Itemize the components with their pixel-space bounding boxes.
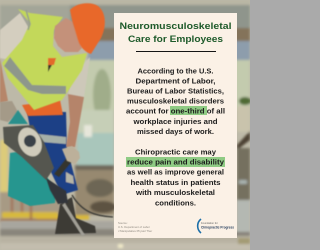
hi-vis vest [2, 9, 87, 110]
text block: statistics: musculoskeletal disorders [127, 96, 224, 106]
head and neck [54, 18, 82, 52]
text block: statistics: workplace injuries and [132, 117, 218, 126]
heading [120, 21, 232, 44]
text block: chiropractic care: with musculoskeletal [135, 188, 215, 197]
heading divider [136, 51, 216, 52]
source note: U.S. Department of Labor [118, 225, 150, 229]
logo: Foundation for Chiropractic Progress [198, 219, 235, 233]
worker legs and trousers [27, 112, 78, 195]
text block: statistics: Bureau of Labor Statistics, [127, 86, 224, 96]
text block: chiropractic care [127, 148, 225, 208]
source note: J Manipulative Physiol Ther [118, 229, 152, 233]
gloved hands [62, 146, 80, 164]
text block: chiropractic care: Chiropractic care may [135, 148, 217, 156]
highlight: reduce pain and disability [126, 157, 225, 167]
worker arm and shirt [0, 13, 90, 147]
text block: chiropractic care: health status in patients [130, 178, 220, 187]
heading: Neuromusculoskeletal [120, 21, 232, 31]
text block: statistics: According to the U.S. [138, 66, 214, 76]
pavement [0, 221, 250, 250]
highlight: one-third [170, 106, 207, 115]
text block: chiropractic care: reduce pain and disability [127, 158, 225, 166]
teal tarp [8, 150, 56, 206]
source note [118, 221, 152, 233]
jackhammer [3, 124, 113, 236]
teal drill casing under hand [8, 110, 28, 124]
text block: statistics [126, 66, 225, 136]
logo: Foundation for Chiropractic Progress: Foundation for [201, 221, 218, 225]
text block: statistics: missed days of work. [137, 127, 214, 136]
source note: Source: [118, 221, 128, 225]
icon: orange hard hat [70, 3, 105, 54]
background photo: construction site [0, 0, 251, 250]
text block: statistics: Department of Labor, [136, 76, 216, 86]
heading: Care for Employees [128, 34, 223, 44]
text block: statistics: account for one-third of all [126, 106, 225, 116]
work boot [55, 197, 96, 234]
text block: chiropractic care: as well as improve general [127, 168, 224, 176]
text block: chiropractic care: conditions. [155, 198, 196, 208]
illustration: worker with jackhammer [0, 3, 113, 236]
logo: Foundation for Chiropractic Progress: Chiropractic Progress [201, 224, 235, 230]
panel: text card [114, 13, 237, 238]
